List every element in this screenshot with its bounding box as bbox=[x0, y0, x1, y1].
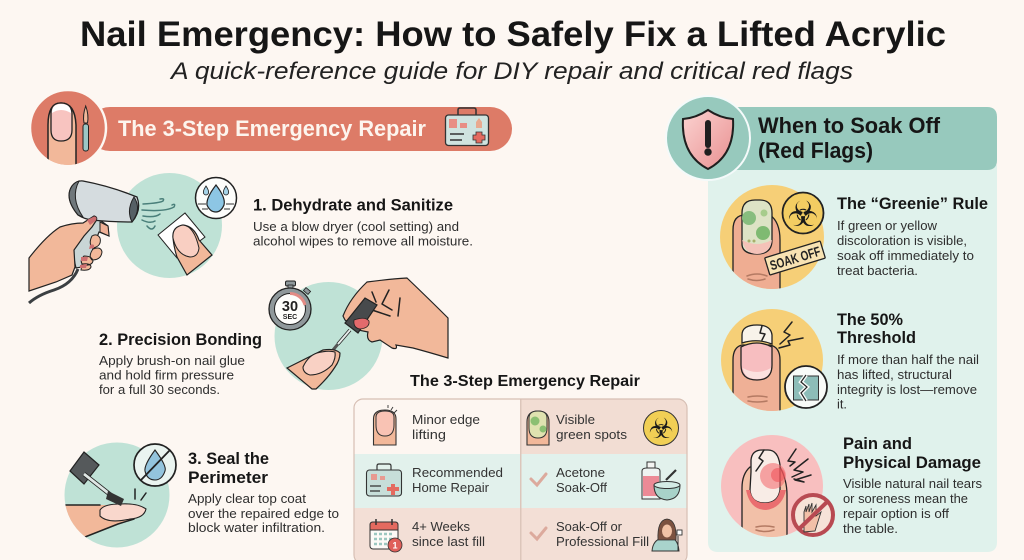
threshold heading: Threshold bbox=[837, 329, 916, 347]
stamp: soak off: SOAK OFF bbox=[768, 244, 822, 273]
icon: 30 second stopwatch: SEC bbox=[283, 314, 297, 321]
illustration: blow dryer and alcohol wipe bbox=[29, 173, 236, 303]
red flag: pain and physical damage bbox=[721, 434, 982, 545]
text: soak-off or professional fill: Professional Fill bbox=[556, 534, 649, 549]
title: Nail Emergency: How to Safely Fix a Lifted Acrylic bbox=[80, 15, 946, 54]
illustration: sealing the nail edge bbox=[60, 442, 176, 548]
icon: calendar: 1 bbox=[392, 540, 398, 550]
pain text: the table. bbox=[843, 522, 898, 536]
row: acetone soak-off bbox=[531, 462, 680, 500]
pain heading: Physical Damage bbox=[843, 453, 981, 472]
threshold text: integrity is lost—remove bbox=[837, 383, 977, 397]
text: minor edge lifting: Minor edge bbox=[412, 412, 480, 427]
text: 4+ weeks since last fill: 4+ Weeks bbox=[412, 519, 470, 534]
row: recommended home repair bbox=[366, 464, 503, 496]
panel: step 1 bbox=[29, 173, 473, 303]
pain heading: Pain and bbox=[843, 434, 912, 453]
pain text: or soreness mean the bbox=[843, 492, 968, 506]
greenie text: discoloration is visible, bbox=[837, 234, 967, 248]
illustration: half lifted nail bbox=[721, 309, 827, 420]
row: 4+ weeks since last fill bbox=[370, 519, 485, 552]
icon: biohazard: ☣ bbox=[787, 195, 819, 235]
icon: acetone bottle and bowl bbox=[642, 462, 680, 500]
icon: biohazard bbox=[644, 410, 678, 446]
step 2 text: for a full 30 seconds. bbox=[99, 383, 220, 397]
text: visible green spots: green spots bbox=[556, 427, 628, 442]
red flags heading: (Red Flags) bbox=[758, 138, 873, 163]
icon: check mark bbox=[531, 474, 546, 485]
illustration: brush-on glue and timer bbox=[269, 278, 448, 390]
text: soak-off or professional fill: Soak-Off or bbox=[556, 519, 623, 534]
red flags heading: When to Soak Off bbox=[758, 113, 941, 138]
panel: repair header banner bbox=[30, 90, 512, 170]
illustration: green discolored nail bbox=[720, 185, 825, 300]
panel: comparison table bbox=[354, 399, 687, 560]
greenie text: treat bacteria. bbox=[837, 264, 918, 278]
step 3 heading: 3. Seal the bbox=[188, 449, 269, 468]
threshold text: has lifted, structural bbox=[837, 368, 952, 382]
row: soak-off or professional fill bbox=[531, 519, 682, 551]
comparison table heading: The 3-Step Emergency Repair bbox=[410, 373, 640, 390]
red flags body bbox=[708, 165, 997, 552]
step 2 text: Apply brush-on nail glue bbox=[99, 354, 245, 368]
icon: nail professional bbox=[652, 519, 682, 551]
red flag: greenie rule bbox=[720, 185, 988, 300]
subtitle: A quick-reference guide for DIY repair and critical red flags bbox=[169, 58, 853, 85]
pain text: repair option is off bbox=[843, 507, 950, 521]
threshold text: it. bbox=[837, 398, 847, 412]
illustration: injured nail bbox=[721, 435, 833, 545]
red flags header bar bbox=[725, 107, 997, 170]
icon: do not touch bbox=[793, 495, 833, 535]
threshold heading: The 50% bbox=[837, 311, 903, 329]
step 1 text: alcohol wipes to remove all moisture. bbox=[253, 234, 473, 248]
red flag: 50 percent threshold bbox=[721, 309, 979, 420]
step 1 heading: 1. Dehydrate and Sanitize bbox=[253, 196, 453, 214]
row: visible green spots bbox=[527, 410, 678, 446]
step 3 text: over the repaired edge to bbox=[188, 507, 339, 521]
step 2 heading: 2. Precision Bonding bbox=[99, 330, 262, 349]
banner heading: The 3-Step Emergency Repair bbox=[118, 116, 426, 141]
icon: nail and brush badge bbox=[30, 90, 106, 170]
greenie heading: The “Greenie” Rule bbox=[837, 195, 988, 213]
text: recommended home repair: Home Repair bbox=[412, 480, 490, 495]
step 2 text: and hold firm pressure bbox=[99, 368, 234, 382]
icon: water drop bbox=[196, 178, 236, 218]
text: minor edge lifting: lifting bbox=[412, 427, 446, 442]
icon: green spotted nail bbox=[527, 411, 549, 445]
text: 4+ weeks since last fill: since last fill bbox=[412, 534, 485, 549]
step 3 heading: Perimeter bbox=[188, 468, 268, 487]
icon: lifted nail bbox=[374, 405, 397, 445]
pain text: Visible natural nail tears bbox=[843, 477, 982, 491]
panel: red flags bbox=[666, 96, 997, 552]
step 1 text: Use a blow dryer (cool setting) and bbox=[253, 220, 459, 234]
panel: step 2 bbox=[99, 278, 448, 397]
row: minor edge lifting bbox=[374, 405, 480, 445]
icon: 30 second stopwatch: 30 bbox=[282, 299, 298, 315]
icon: biohazard: ☣ bbox=[648, 412, 674, 445]
text: recommended home repair: Recommended bbox=[412, 465, 503, 480]
panel: step 3 bbox=[60, 442, 339, 548]
text: acetone soak-off: Acetone bbox=[556, 465, 605, 480]
icon: check mark bbox=[531, 528, 546, 539]
icon: warning shield bbox=[666, 96, 750, 180]
icon: first aid kit bbox=[446, 108, 488, 146]
step 3 text: block water infiltration. bbox=[188, 521, 325, 535]
greenie text: soak off immediately to bbox=[837, 249, 974, 263]
icon: small first aid kit bbox=[366, 464, 402, 496]
text: visible green spots: Visible bbox=[556, 412, 595, 427]
text: acetone soak-off: Soak-Off bbox=[556, 480, 607, 495]
icon: no water bbox=[134, 444, 176, 486]
icon: 30 second stopwatch bbox=[269, 281, 311, 330]
threshold text: If more than half the nail bbox=[837, 353, 979, 367]
step 3 text: Apply clear top coat bbox=[188, 492, 307, 506]
icon: cracked block bbox=[785, 366, 827, 408]
greenie text: If green or yellow bbox=[837, 219, 938, 233]
